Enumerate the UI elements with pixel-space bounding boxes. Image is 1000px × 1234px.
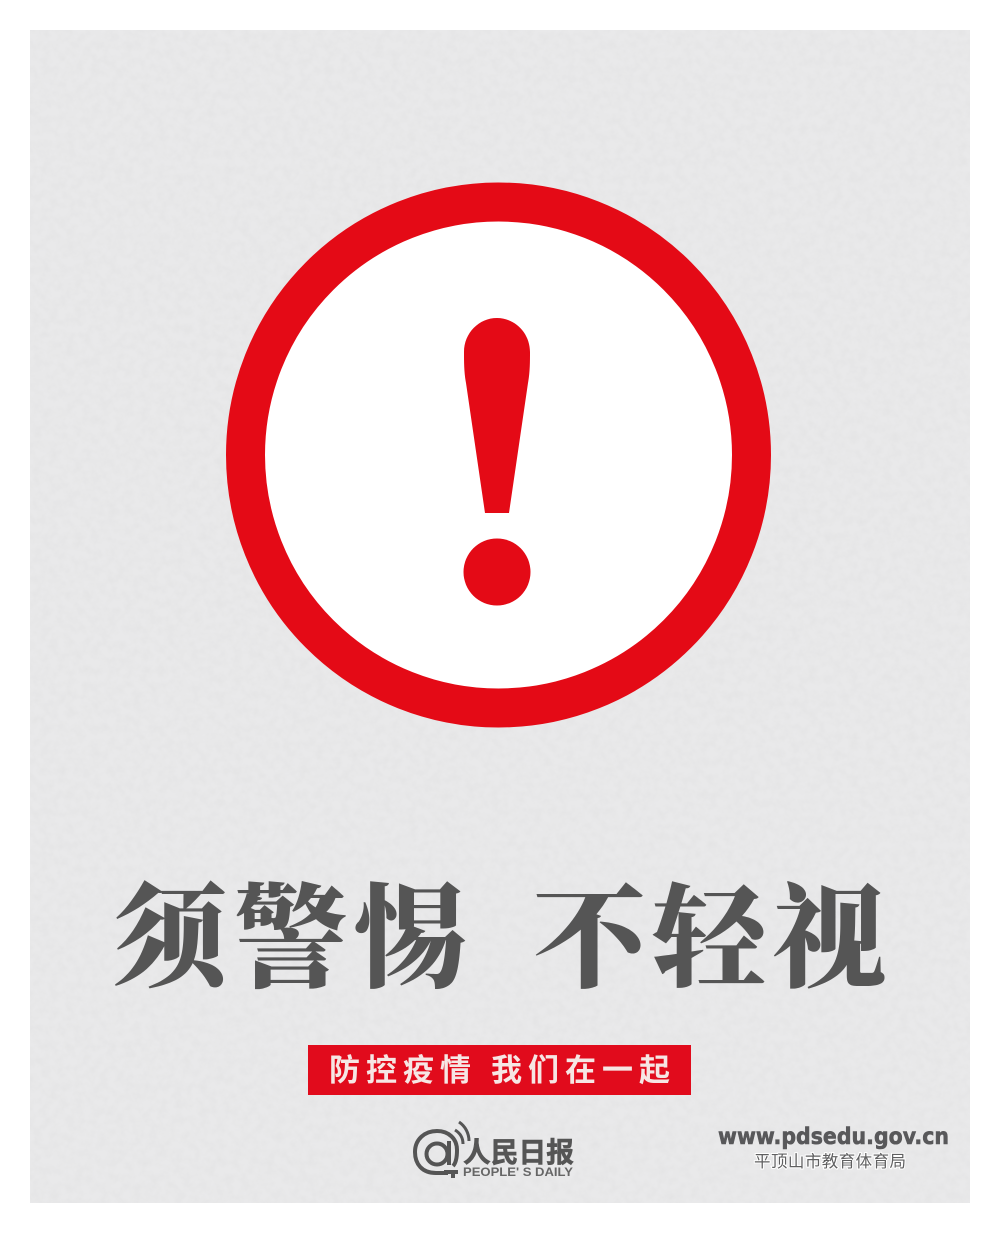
watermark organisation: 平顶山市教育体育局 [754,1152,906,1171]
warning ring [246,202,752,708]
icon: warning sign [246,202,752,708]
logo English name: PEOPLE' S DAILY [463,1165,573,1179]
logo Chinese name: 人民日报 [463,1137,574,1168]
heading: 视 [773,878,886,1003]
heading: 轻 [652,878,772,1003]
logo: People's Daily [415,1122,574,1179]
banner background [308,1045,691,1095]
heading [114,878,886,1003]
heading: 不 [533,878,652,1003]
slogan banner [308,1045,691,1095]
exclamation mark stem [464,318,530,513]
icon: at sign with signal waves [415,1122,469,1178]
watermark URL: www.pdsedu.gov.cn [718,1124,949,1150]
heading: 警 [234,878,347,1003]
heading: 须 [114,878,235,1003]
banner text: 防控疫情 [329,1053,477,1088]
heading: 惕 [354,878,467,1003]
exclamation mark dot [464,538,530,606]
banner text [329,1053,676,1088]
watermark [718,1124,949,1171]
banner text: 我们在一起 [491,1053,676,1088]
